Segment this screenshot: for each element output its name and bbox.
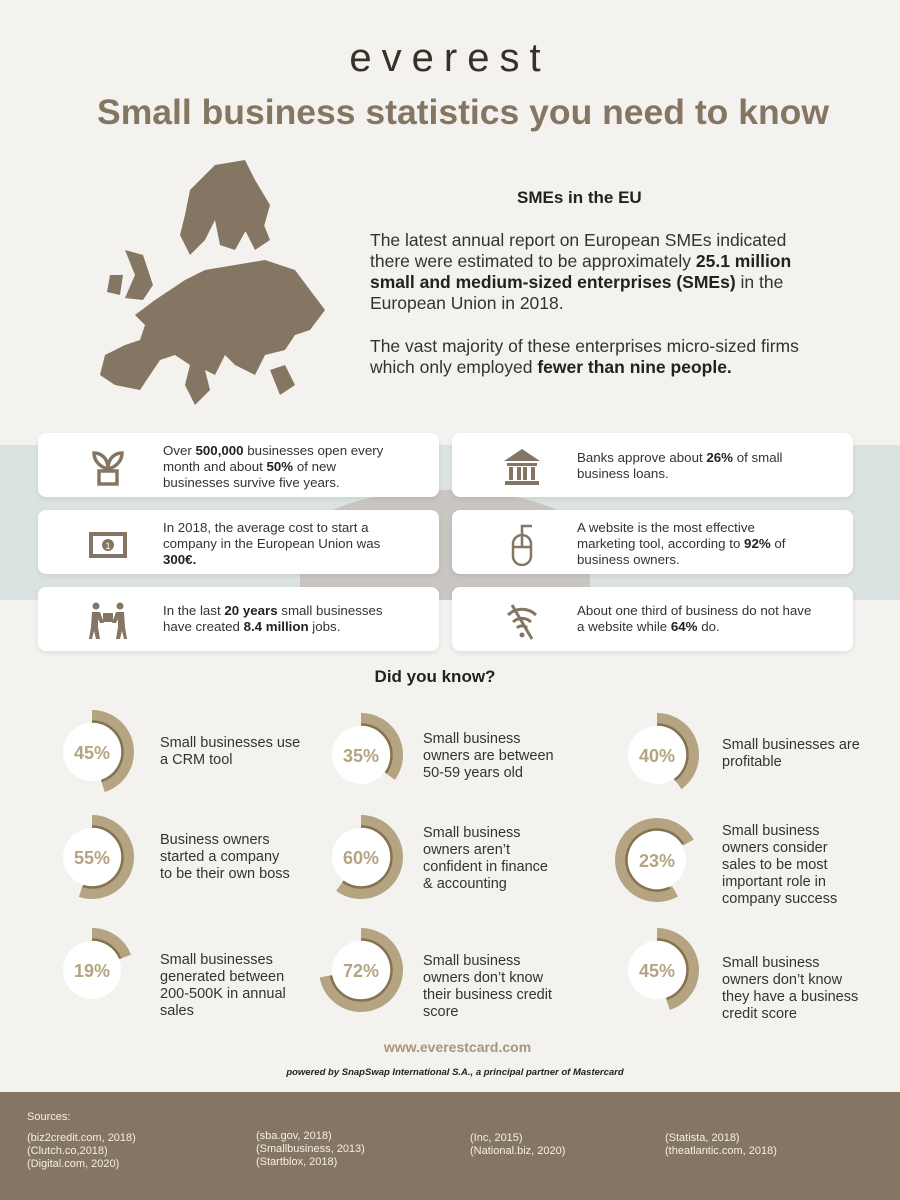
text: & accounting	[423, 876, 507, 892]
card: website: marketing tool, according to 92% of	[577, 536, 785, 551]
card: cost: company in the European Union was	[163, 536, 380, 551]
text: SMEs paragraph	[370, 230, 799, 377]
donut: 45% credit score	[628, 928, 699, 1010]
text: owners are between	[423, 748, 554, 764]
text: SMEs paragraph: The latest annual report on European SMEs indicated	[370, 230, 786, 250]
card: cost	[38, 510, 439, 574]
footer: sources: (theatlantic.com, 2018)	[665, 1145, 777, 1157]
donut: 19% sales revenue: 19%	[74, 961, 110, 981]
icon: plant	[92, 451, 124, 486]
donut: 60% finance	[332, 815, 403, 899]
text: owners consider	[722, 840, 828, 856]
text: SMEs paragraph: which only employed fewer than nine people.	[370, 357, 732, 377]
text: Small business	[722, 955, 820, 971]
footer: sources: (Digital.com, 2020)	[27, 1158, 119, 1170]
card: jobs	[38, 587, 439, 651]
footer: sources	[0, 1092, 900, 1200]
text: Small business	[423, 953, 521, 969]
card: no website: a website while 64% do.	[577, 619, 720, 634]
donut: 55% own boss: 55%	[74, 848, 110, 868]
logo: everest	[349, 36, 551, 80]
text: 200-500K in annual	[160, 986, 286, 1002]
footer: sources: (National.biz, 2020)	[470, 1145, 565, 1157]
text: SMEs paragraph: small and medium-sized enterprises (SMEs) in the	[370, 272, 783, 292]
text: SMEs paragraph: European Union in 2018. The vast majority of these enterprises micro-sized firms	[370, 293, 799, 356]
background band	[0, 445, 900, 600]
text: credit score	[722, 1006, 797, 1022]
text: owners don’t know	[423, 970, 543, 986]
card: no website	[452, 587, 853, 651]
card: website	[452, 510, 853, 574]
text: generated between	[160, 969, 284, 985]
text: Small business	[423, 731, 521, 747]
footer: sources: (biz2credit.com, 2018)	[27, 1132, 136, 1144]
card: survive	[38, 433, 439, 497]
text: owners aren’t	[423, 842, 510, 858]
map: Europe	[100, 160, 325, 405]
donut: 23% sales	[615, 818, 694, 902]
title: Small business statistics you need to know	[97, 92, 829, 132]
card: cost: In 2018, the average cost to start a	[163, 520, 368, 535]
card: survive: businesses survive five years.	[163, 475, 340, 490]
card: website: A website is the most effective	[577, 520, 755, 535]
footer: sources: Sources:	[27, 1111, 70, 1123]
card: jobs: In the last 20 years small businesses	[163, 603, 383, 618]
text: Small business	[423, 825, 521, 841]
text: score	[423, 1004, 458, 1020]
text: sales to be most	[722, 857, 828, 873]
text: Business owners	[160, 832, 270, 848]
card: survive: Over 500,000 businesses open every	[163, 443, 383, 458]
text: their business credit	[423, 987, 552, 1003]
card: banks	[452, 433, 853, 497]
icon: wifi off	[507, 604, 537, 640]
card: survive: month and about 50% of new	[163, 459, 336, 474]
heading: Did you know: Did you know?	[375, 667, 495, 686]
donut: 40% profitable: 40%	[639, 746, 675, 766]
text: they have a business	[722, 989, 858, 1005]
icon: banknote: 1	[105, 541, 111, 551]
card: jobs: have created 8.4 million jobs.	[163, 619, 340, 634]
footer: sources: (Inc, 2015)	[470, 1132, 523, 1144]
footer: sources: (sba.gov, 2018)	[256, 1130, 332, 1142]
text: sales	[160, 1003, 194, 1019]
text: SMEs paragraph: there were estimated to be approximately 25.1 million	[370, 251, 791, 271]
icon: people carrying box	[89, 602, 127, 639]
card: website: business owners.	[577, 552, 680, 567]
text: Small businesses are	[722, 737, 860, 753]
heading: SMEs in the EU: SMEs in the EU	[517, 188, 642, 207]
donut: 23% sales: 23%	[639, 851, 675, 871]
donut: 19% sales revenue	[63, 928, 131, 999]
url: www.everestcard.com	[384, 1039, 531, 1055]
text: 50-59 years old	[423, 765, 523, 781]
footer: sources: (Smallbusiness, 2013)	[256, 1143, 365, 1155]
text: Small business	[722, 823, 820, 839]
icon: bank	[504, 449, 540, 485]
card: no website: About one third of business do not have	[577, 603, 811, 618]
donut: 45% CRM	[63, 710, 134, 792]
footer: sources: (Statista, 2018)	[665, 1132, 740, 1144]
card: banks: business loans.	[577, 466, 669, 481]
text: Small businesses	[160, 952, 273, 968]
donut: 60% finance: 60%	[343, 848, 379, 868]
donut: 45% credit score: 45%	[639, 961, 675, 981]
donut: 72% credit score	[320, 928, 403, 1012]
text: company success	[722, 891, 837, 907]
donut: 40% profitable	[628, 713, 699, 789]
card: cost: 300€.	[163, 552, 196, 567]
text: owners don’t know	[722, 972, 842, 988]
text: profitable	[722, 754, 782, 770]
text: to be their own boss	[160, 866, 290, 882]
donut: 45% CRM: 45%	[74, 743, 110, 763]
footer: sources: (Clutch.co,2018)	[27, 1145, 108, 1157]
donut: 35% age: 35%	[343, 746, 379, 766]
text: a CRM tool	[160, 752, 233, 768]
card: banks: Banks approve about 26% of small	[577, 450, 783, 465]
powered by: powered by SnapSwap International S.A., a principal partner of Mastercard	[286, 1067, 624, 1078]
icon: banknote	[89, 532, 127, 558]
text: Small businesses use	[160, 735, 300, 751]
text: important role in	[722, 874, 826, 890]
text: started a company	[160, 849, 279, 865]
text: confident in finance	[423, 859, 548, 875]
footer: sources: (Startblox, 2018)	[256, 1156, 337, 1168]
donut: 55% own boss	[63, 815, 134, 899]
icon: mouse	[512, 524, 532, 566]
donut: 35% age	[332, 713, 403, 784]
donut: 72% credit score: 72%	[343, 961, 379, 981]
